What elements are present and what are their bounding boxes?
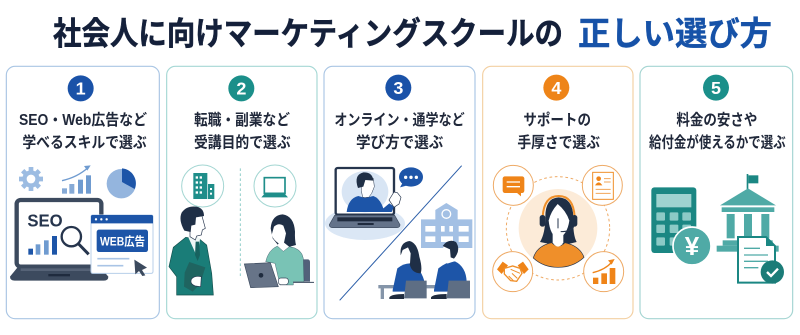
panel: card 1 skills [6, 66, 159, 319]
panel: card 3 learning style [324, 66, 475, 319]
figure: businessman [169, 206, 213, 295]
illustration: classroom students [378, 241, 470, 299]
heading: card 1: 学べるスキルで選ぶ [22, 133, 147, 151]
icon: speech bubble [399, 167, 423, 187]
heading: card 1 [19, 111, 148, 151]
heading: card 2 [194, 111, 291, 151]
icon: pie chart [107, 168, 136, 198]
number badge 2: 2 [236, 79, 246, 99]
number badge 1: 1 [76, 79, 86, 99]
heading: card 4 [517, 112, 601, 151]
number badge 5 [703, 75, 729, 101]
heading: card 1: SEO・Web広告など [19, 111, 148, 129]
heading: card 4: 手厚さで選ぶ [517, 134, 601, 151]
panel: card 5 price [640, 66, 793, 319]
icon: web ad window [91, 215, 153, 276]
icon: laptop [254, 165, 296, 207]
number badge 3 [385, 75, 411, 101]
icon: calculator [651, 187, 696, 253]
icon: growth chart [62, 165, 91, 194]
illustration: support operator [519, 189, 597, 268]
icon: handshake [493, 252, 533, 292]
icon: web ad window: WEB広告 [100, 234, 145, 249]
heading: card 5 [649, 111, 786, 151]
icon: growth bars [584, 252, 624, 292]
number badge 4 [543, 75, 569, 101]
title: 社会人に向けマーケティングスクールの [53, 16, 563, 52]
icon: laptop with SEO [10, 200, 108, 281]
icon: office building [182, 165, 224, 207]
icon: bank building [717, 174, 779, 252]
heading: card 4: サポートの [523, 112, 591, 129]
figure: woman with laptop [244, 214, 314, 288]
icon: yen coin [673, 227, 711, 265]
number badge 1 [68, 75, 94, 101]
heading: card 3: 学び方で選ぶ [356, 133, 444, 151]
title: 正しい選び方 [578, 15, 772, 52]
heading: card 5: 料金の安さや [676, 111, 757, 129]
icon: school building [421, 203, 472, 248]
panel: card 2 purpose [167, 66, 317, 319]
icon: laptop with SEO: SEO [27, 211, 63, 231]
heading: card 2: 転職・副業など [194, 111, 291, 129]
number badge 4: 4 [551, 78, 561, 98]
icon: chat bubble [493, 165, 533, 205]
number badge 5: 5 [711, 78, 721, 98]
number badge 3: 3 [393, 78, 403, 98]
heading: card 3 [334, 111, 465, 151]
illustration: online lesson [325, 168, 405, 240]
panel: card 4 support [483, 66, 633, 319]
number badge 2 [228, 75, 254, 101]
heading: card 2: 受講目的で選ぶ [194, 133, 291, 151]
heading: card 3: オンライン・通学など [334, 111, 465, 129]
icon: document with check [738, 237, 784, 284]
icon: gear [19, 167, 43, 191]
icon: profile document [582, 165, 622, 205]
icon: yen coin: ¥ [685, 231, 700, 261]
